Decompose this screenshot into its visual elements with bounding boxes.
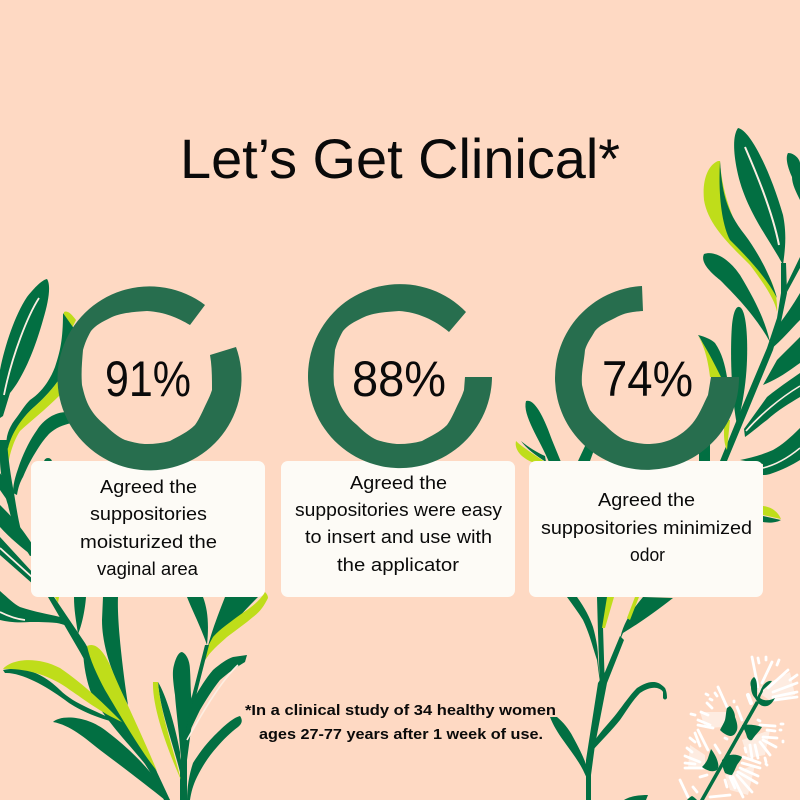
- card text 1: moisturized the: [80, 531, 217, 552]
- stat: 91%: 91%: [105, 351, 191, 407]
- card text 3: suppositories minimized: [541, 517, 752, 538]
- card text 1: [80, 476, 217, 579]
- plant: right lower branch: [550, 597, 673, 800]
- flower sprig: [680, 657, 797, 800]
- card text 2: Agreed the: [350, 472, 447, 493]
- card text 2: [295, 472, 503, 575]
- card text 2: the applicator: [337, 554, 459, 575]
- progress ring: 88%: [308, 284, 492, 468]
- card text 2: to insert and use with: [305, 526, 492, 547]
- stat: 74%: 74%: [602, 351, 693, 407]
- plant: center-left branch: [153, 592, 268, 800]
- card text 3: odor: [630, 544, 665, 565]
- card text 1: Agreed the: [100, 476, 197, 497]
- progress ring: 74%: [555, 286, 739, 470]
- plant: behind third ring: [516, 401, 594, 462]
- footnote: *In a clinical study of 34 healthy women: [245, 702, 556, 719]
- card text 3: [541, 489, 752, 565]
- card 1: [31, 461, 265, 597]
- title: Let’s Get Clinical*: [180, 127, 620, 190]
- footnote: ages 27-77 years after 1 week of use.: [259, 726, 543, 743]
- card 2: [281, 461, 515, 597]
- plant: left lower branch: [0, 591, 170, 800]
- footnote: [245, 702, 556, 743]
- card text 3: Agreed the: [598, 489, 695, 510]
- card 3: [529, 461, 763, 597]
- progress ring: 91%: [58, 286, 242, 470]
- card text 2: suppositories were easy: [295, 499, 503, 520]
- card text 1: suppositories: [90, 503, 207, 524]
- plant: right upper branch: [698, 128, 800, 523]
- plant: left upper branch: [0, 279, 76, 585]
- stat: 88%: 88%: [352, 351, 446, 407]
- card text 1: vaginal area: [97, 558, 199, 579]
